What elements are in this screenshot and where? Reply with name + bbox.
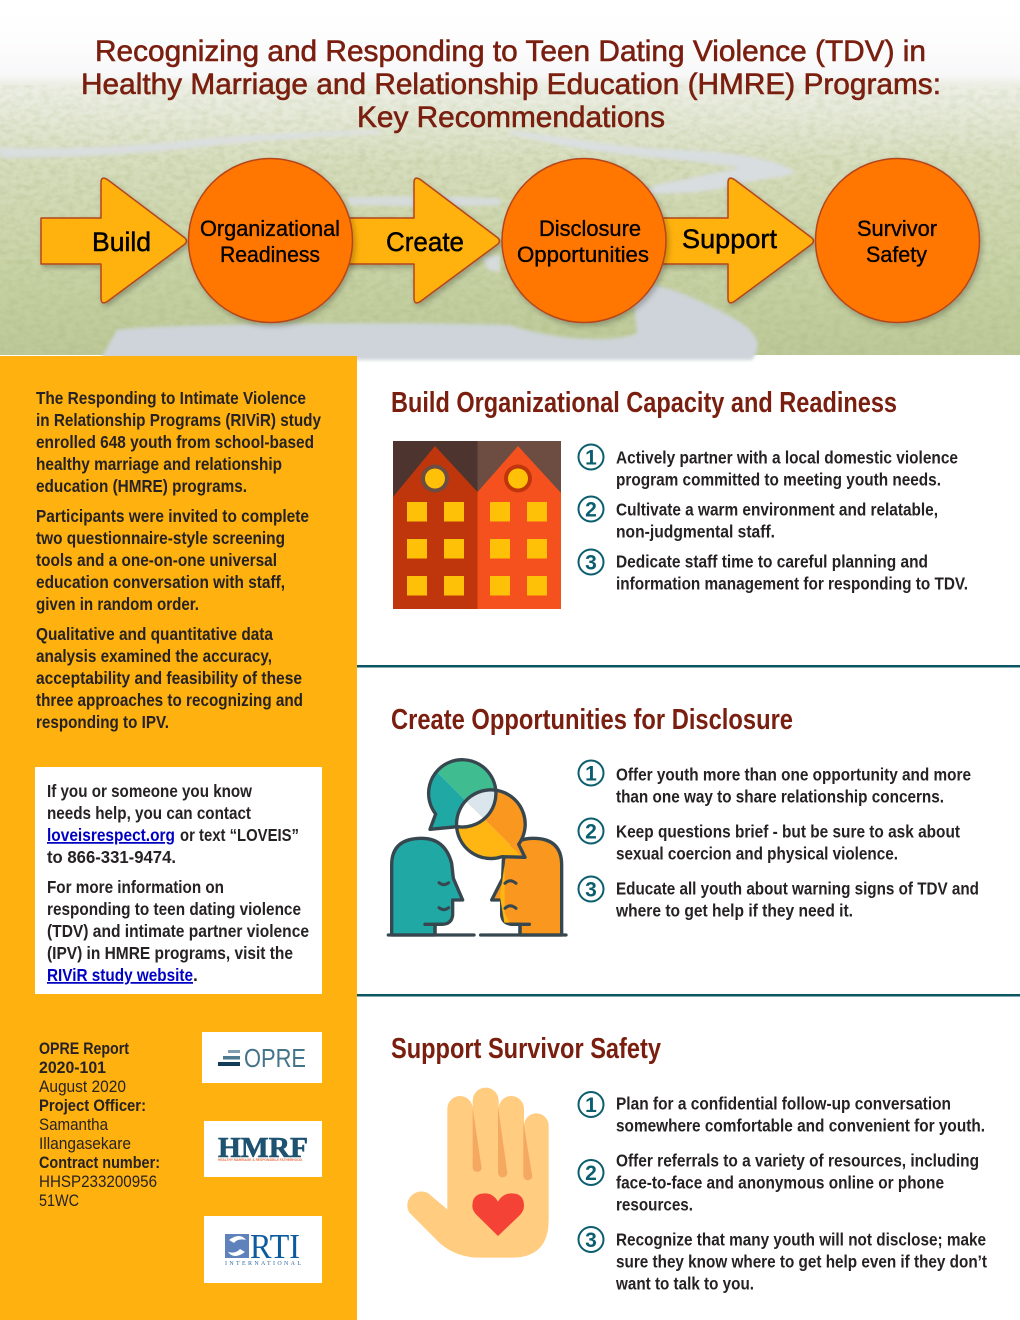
text block: study description: enrolled 648 youth from school-based (36, 432, 314, 452)
circle: Organizational Readiness: Organizational (200, 216, 340, 241)
list item 2: sexual coercion and physical violence. (616, 844, 898, 864)
list item 2: 2 (585, 1162, 597, 1185)
text block: study description: three approaches to recognizing and (36, 690, 303, 710)
arrow: Build: Build (92, 227, 151, 257)
list item 1: program committed to meeting youth needs. (616, 470, 941, 490)
callout: where to get help: to 866-331-9474. (47, 847, 176, 867)
list item 2: Offer referrals to a variety of resources, including (616, 1150, 979, 1170)
circle: Disclosure Opportunities (502, 158, 666, 322)
header background: aerial landscape (0, 0, 1020, 360)
list item 3 (578, 1227, 987, 1294)
arrow: Support: Support (682, 224, 777, 254)
circle: Disclosure Opportunities: Opportunities (517, 242, 649, 267)
callout: where to get help: If you or someone you know (47, 781, 252, 801)
text block: report details (39, 1040, 160, 1210)
heading: create opportunities: Create Opportunities for Disclosure (391, 704, 793, 736)
title (81, 35, 941, 134)
text block: study description (36, 388, 321, 732)
text block: study description: Participants were invited to complete (36, 506, 309, 526)
list item 2: Keep questions brief - but be sure to ask about (616, 822, 960, 842)
list item 1 (578, 760, 971, 806)
list item 3 (578, 876, 979, 920)
callout: where to get help: For more information on (47, 877, 224, 897)
text block: report details: August 2020 (39, 1078, 126, 1096)
arrow: Support (660, 178, 814, 303)
title: Key Recommendations (357, 101, 665, 134)
callout: where to get help: or text “LOVEIS” (180, 825, 299, 845)
text block: study description: in Relationship Programs (RIViR) study (36, 410, 321, 430)
panel: support survivor safety (391, 1033, 987, 1294)
list item 3: Dedicate staff time to careful planning and (616, 552, 928, 572)
list item 3 (578, 550, 968, 594)
list item 1: than one way to share relationship concerns. (616, 786, 944, 806)
text block: study description: two questionnaire-style screening (36, 528, 285, 548)
text block: study description: healthy marriage and relationship (36, 454, 282, 474)
list item 1: 1 (585, 1094, 597, 1117)
text block: study description: education conversation with staff, (36, 572, 285, 592)
text block: report details: 2020-101 (39, 1059, 106, 1077)
list item 3: 3 (585, 552, 597, 574)
list item 1 (578, 1092, 985, 1136)
arrow: Create (345, 178, 500, 303)
arrow: Create: Create (386, 227, 464, 257)
circle: Survivor Safety: Safety (866, 242, 927, 267)
text block: study description: Qualitative and quantitative data (36, 624, 273, 644)
logo: RTI International: INTERNATIONAL (225, 1261, 301, 1267)
heading: build capacity: Build Organizational Capacity and Readiness (391, 387, 897, 419)
list item 2 (578, 496, 938, 542)
list item 1: 1 (585, 762, 597, 786)
list item 2 (578, 818, 960, 864)
text block: report details: Samantha (39, 1116, 109, 1134)
heading: support survivor safety: Support Survivor Safety (391, 1033, 661, 1065)
logo: HMRF: HEALTHY MARRIAGE & RESPONSIBLE FATHERHOOD (218, 1158, 302, 1162)
text block: study description: analysis examined the accuracy, (36, 646, 272, 666)
list item 2: 2 (585, 820, 597, 844)
text block: study description: The Responding to Intimate Violence (36, 388, 306, 408)
list item 1: Actively partner with a local domestic violence (616, 448, 958, 468)
list item 2: 2 (585, 498, 597, 522)
list item 3: 3 (585, 1229, 597, 1252)
text block: report details: Contract number: (39, 1154, 160, 1172)
logo: HMRF (204, 1121, 322, 1177)
list item 3: where to get help if they need it. (615, 900, 853, 920)
text block: report details: OPRE Report (39, 1040, 129, 1058)
logo: RTI International (204, 1216, 322, 1283)
callout: where to get help: needs help, you can contact (47, 803, 251, 823)
logo: RTI International: RTI (250, 1227, 300, 1266)
list item 2: face-to-face and anonymous online or phone (616, 1172, 944, 1192)
list item 1: 1 (585, 446, 597, 470)
logo: HMRF: HMRF (218, 1132, 308, 1164)
panel: left study sidebar (0, 356, 357, 1320)
list item 2: Cultivate a warm environment and relatable, (616, 500, 938, 520)
text block: study description: given in random order. (36, 594, 199, 614)
circle: Survivor Safety: Survivor (857, 216, 937, 241)
list item 3: 3 (585, 878, 597, 902)
title: Recognizing and Responding to Teen Dating Violence (TDV) in (95, 35, 926, 68)
callout: where to get help: (TDV) and intimate partner violence (47, 921, 309, 941)
icon: hand with heart (407, 1088, 549, 1258)
circle: Survivor Safety (816, 158, 980, 322)
text block: report details: Project Officer: (39, 1097, 146, 1115)
icon: two buildings (393, 441, 561, 609)
list item 2 (578, 1150, 979, 1214)
title: Healthy Marriage and Relationship Education (HMRE) Programs: (81, 68, 941, 101)
panel: build organizational capacity (391, 387, 968, 609)
text block: study description: tools and a one-on-one universal (36, 550, 277, 570)
callout: where to get help: loveisrespect.org (47, 825, 175, 845)
circle: Disclosure Opportunities: Disclosure (539, 216, 641, 241)
icon: two people talking (370, 750, 570, 935)
text block: report details: HHSP233200956 (39, 1173, 157, 1191)
list item 1: Plan for a confidential follow-up conversation (616, 1094, 951, 1114)
circle: Organizational Readiness (188, 158, 352, 322)
panel: create opportunities for disclosure (370, 704, 979, 935)
list item 1: Offer youth more than one opportunity and more (616, 764, 971, 784)
callout: where to get help: . (193, 965, 198, 985)
list item 2: resources. (616, 1194, 693, 1214)
text block: study description: education (HMRE) programs. (36, 476, 247, 496)
callout: where to get help: (IPV) in HMRE programs, visit the (47, 943, 293, 963)
logo: OPRE: OPRE (244, 1043, 306, 1073)
text block: study description: responding to IPV. (36, 712, 169, 732)
list item 1 (578, 444, 958, 490)
callout: where to get help: responding to teen dating violence (47, 899, 301, 919)
circle: Organizational Readiness: Readiness (220, 242, 320, 267)
text block: report details: 51WC (39, 1192, 79, 1210)
text block: study description: acceptability and feasibility of these (36, 668, 302, 688)
logo: OPRE (202, 1032, 322, 1083)
list item 2: non-judgmental staff. (616, 522, 775, 542)
text block: report details: Illangasekare (39, 1135, 131, 1153)
callout: where to get help: RIViR study website (47, 965, 193, 985)
callout: where to get help (35, 767, 322, 994)
list item 3: want to talk to you. (615, 1274, 754, 1294)
list item 3: information management for responding to TDV. (616, 574, 968, 594)
arrow: Build (41, 178, 186, 303)
